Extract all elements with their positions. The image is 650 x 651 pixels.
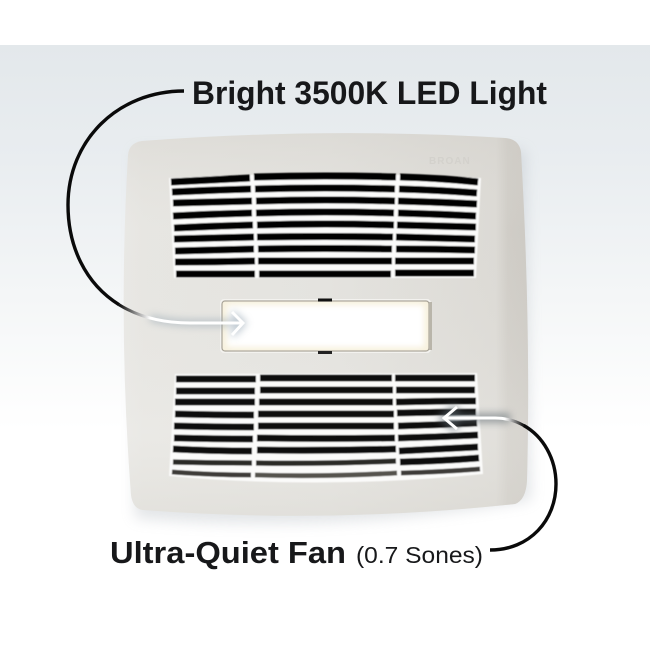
upper grille bbox=[169, 174, 481, 278]
heading: LED light: Bright 3500K LED Light bbox=[192, 75, 547, 111]
noise rating: (0.7 Sones) bbox=[356, 542, 483, 568]
panel: fan cover bbox=[124, 133, 531, 524]
heading: fan: Ultra-Quiet Fan bbox=[110, 535, 346, 570]
arrow: LED light callout bbox=[68, 91, 243, 335]
heading: fan bbox=[110, 535, 483, 570]
lower grille bbox=[169, 373, 483, 483]
logo: embossed brand: BROAN bbox=[429, 156, 471, 167]
arrow: fan callout bbox=[444, 407, 556, 550]
light lens bbox=[220, 298, 432, 354]
